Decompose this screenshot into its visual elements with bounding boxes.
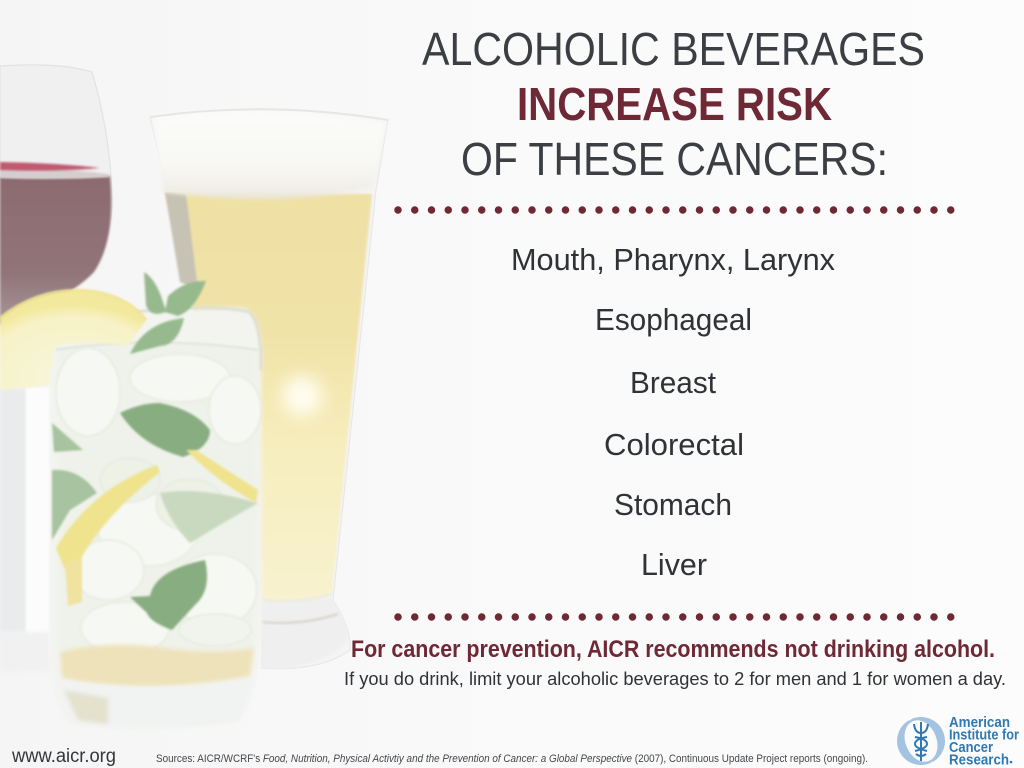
mint leaves in glass xyxy=(52,403,258,630)
photo: alcoholic drinks xyxy=(0,65,388,730)
title line 1: ALCOHOLIC BEVERAGES xyxy=(422,23,925,75)
dotted divider top xyxy=(398,206,952,214)
title xyxy=(422,23,925,185)
list of cancers xyxy=(511,242,835,582)
sugar at the bottom xyxy=(60,645,254,686)
logo wordmark: American xyxy=(949,715,1010,731)
cancer: stomach: Stomach xyxy=(614,487,732,522)
logo: American Institute for Cancer Research xyxy=(897,715,1019,768)
cancer: colorectal: Colorectal xyxy=(604,427,744,462)
cancer: liver: Liver xyxy=(641,547,707,582)
logo wordmark xyxy=(949,715,1019,768)
logo wordmark: Cancer xyxy=(949,740,993,756)
cancer: breast: Breast xyxy=(630,365,716,400)
title line 2: emphasis: INCREASE RISK xyxy=(517,78,832,130)
lemon slices in glass xyxy=(56,450,258,606)
logo emblem xyxy=(897,715,945,767)
beer glass xyxy=(150,109,388,669)
wine glass xyxy=(0,65,112,672)
ice cubes xyxy=(56,348,261,654)
cancer: esophageal: Esophageal xyxy=(595,302,752,337)
dotted divider bottom xyxy=(398,613,952,621)
rim of the glass xyxy=(135,308,261,370)
cancer: mouth, pharynx, larynx: Mouth, Pharynx, Larynx xyxy=(511,242,835,277)
mint sprig xyxy=(130,272,206,354)
cocktail glass xyxy=(0,272,262,730)
glass base xyxy=(56,680,252,727)
website: www.aicr.org xyxy=(11,746,116,767)
lemon wedge xyxy=(0,290,146,390)
drinking limit advice: If you do drink, limit your alcoholic beverages to 2 for men and 1 for women a day. xyxy=(344,669,1006,689)
sources: Sources: AICR/WCRF's Food, Nutrition, Physical Activtiy and the Prevention of Cancer: a Global Perspective (2007), Continuous Update Project reports (ongoing). xyxy=(156,753,868,765)
title line 3: OF THESE CANCERS: xyxy=(461,133,888,185)
